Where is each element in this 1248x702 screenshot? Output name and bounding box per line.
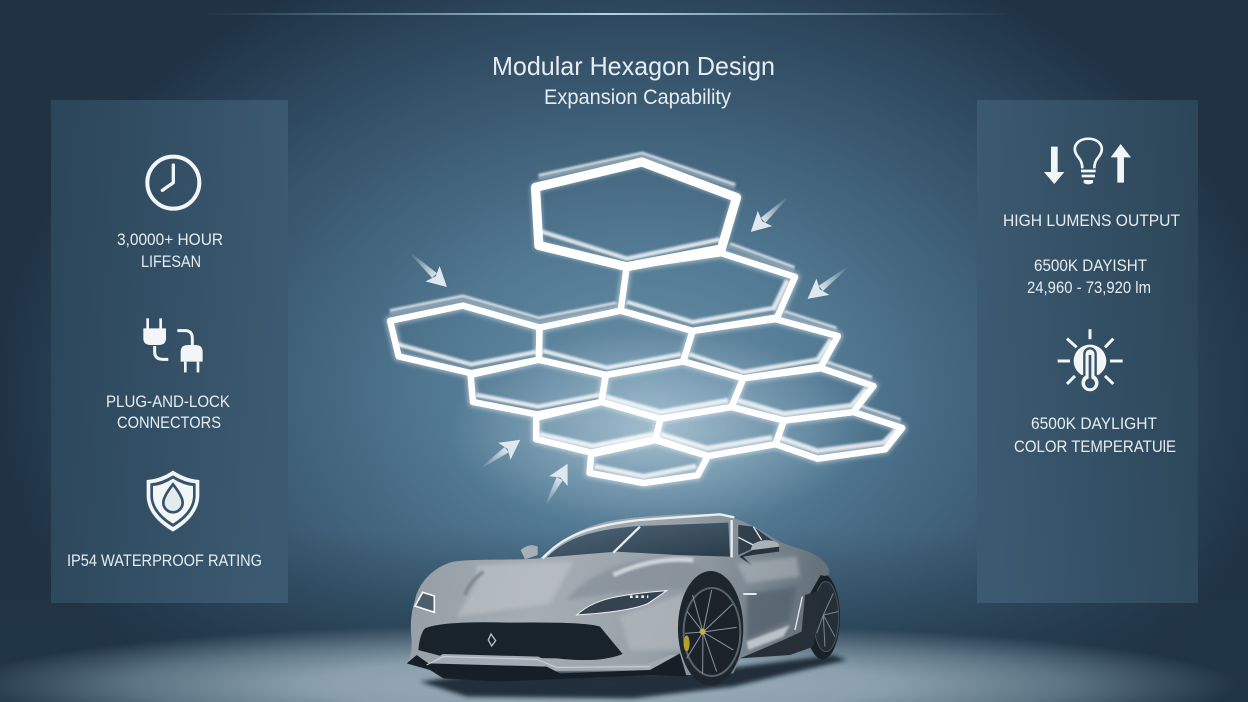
hood left crease	[465, 572, 483, 595]
door shadow	[747, 587, 797, 640]
arrow: lower left 2	[536, 459, 577, 510]
text: color temperature: 6500K DAYLIGHT	[1031, 414, 1157, 433]
bumper light	[620, 593, 683, 650]
text: color temperature	[1014, 414, 1176, 456]
hood highlight	[457, 562, 573, 617]
floor	[0, 622, 1248, 702]
title: Modular Hexagon Design	[492, 51, 775, 81]
arrow: upper right 2	[801, 259, 855, 307]
left panel background	[51, 100, 288, 603]
rear wheel	[805, 574, 840, 659]
front splitter	[407, 653, 687, 682]
hexagon tubes	[390, 162, 902, 483]
reflected light edges	[390, 154, 901, 476]
top light line	[205, 13, 1010, 15]
splitter highlight	[427, 657, 650, 667]
right mirror	[751, 540, 780, 555]
side skirt	[740, 590, 822, 658]
icon: clock	[147, 157, 199, 209]
right panel background	[977, 100, 1198, 603]
text: lumens values: 6500K DAYISHT	[1034, 256, 1147, 275]
text: high lumens: HIGH LUMENS OUTPUT	[1003, 211, 1180, 230]
headlight lamps	[630, 593, 648, 601]
text: lifespan: LIFESAN	[141, 252, 201, 271]
left headlight	[415, 592, 434, 612]
roof and pillar highlights	[543, 514, 734, 558]
side trim line	[795, 597, 802, 630]
text: connectors: PLUG-AND-LOCK	[106, 392, 231, 411]
arrow: upper right 1	[744, 189, 795, 240]
icon: sun thermometer	[1058, 329, 1123, 392]
text: waterproof rating: IP54 WATERPROOF RATING	[67, 551, 262, 570]
side window	[738, 525, 777, 555]
glow behind lower hexagons	[448, 329, 867, 532]
text: lifespan: 3,0000+ HOUR	[117, 230, 223, 249]
icon: bulb with arrows	[1044, 139, 1131, 184]
side window chrome	[738, 527, 762, 545]
soft halo around tubes	[390, 162, 902, 483]
door highlight	[737, 557, 800, 583]
car body	[407, 514, 829, 675]
panel: left features	[51, 100, 288, 603]
subtitle: Expansion Capability	[544, 86, 731, 109]
icon: waterproof shield	[147, 471, 199, 532]
fender shade	[567, 557, 705, 600]
lower lip body	[428, 654, 683, 673]
text: lifespan	[117, 230, 223, 271]
right mirror underside	[739, 547, 779, 567]
arrow: lower left 1	[475, 431, 526, 476]
left mirror	[521, 545, 538, 559]
windshield	[547, 523, 730, 557]
door handle glint	[743, 591, 757, 597]
front wheel arch	[678, 571, 743, 686]
panel: right features	[977, 100, 1198, 603]
silver sports car	[407, 514, 847, 698]
door lower reflection	[747, 625, 790, 650]
icon: plugs	[143, 318, 203, 372]
car ground shadow	[420, 655, 847, 698]
text: connectors	[106, 392, 231, 432]
front wheel	[684, 588, 740, 676]
text: lumens values	[1027, 256, 1151, 297]
hexagon light array	[390, 154, 902, 532]
text: color temperature: COLOR TEMPERATUlE	[1014, 437, 1176, 456]
arrow: upper left	[403, 246, 454, 295]
grille	[418, 622, 623, 660]
text: connectors: CONNECTORS	[117, 413, 221, 432]
text: lumens values: 24,960 - 73,920 lm	[1027, 278, 1151, 297]
wall shading above floor	[0, 530, 1248, 702]
fender crest	[613, 559, 693, 575]
right headlight	[577, 591, 667, 615]
badge	[488, 634, 496, 646]
